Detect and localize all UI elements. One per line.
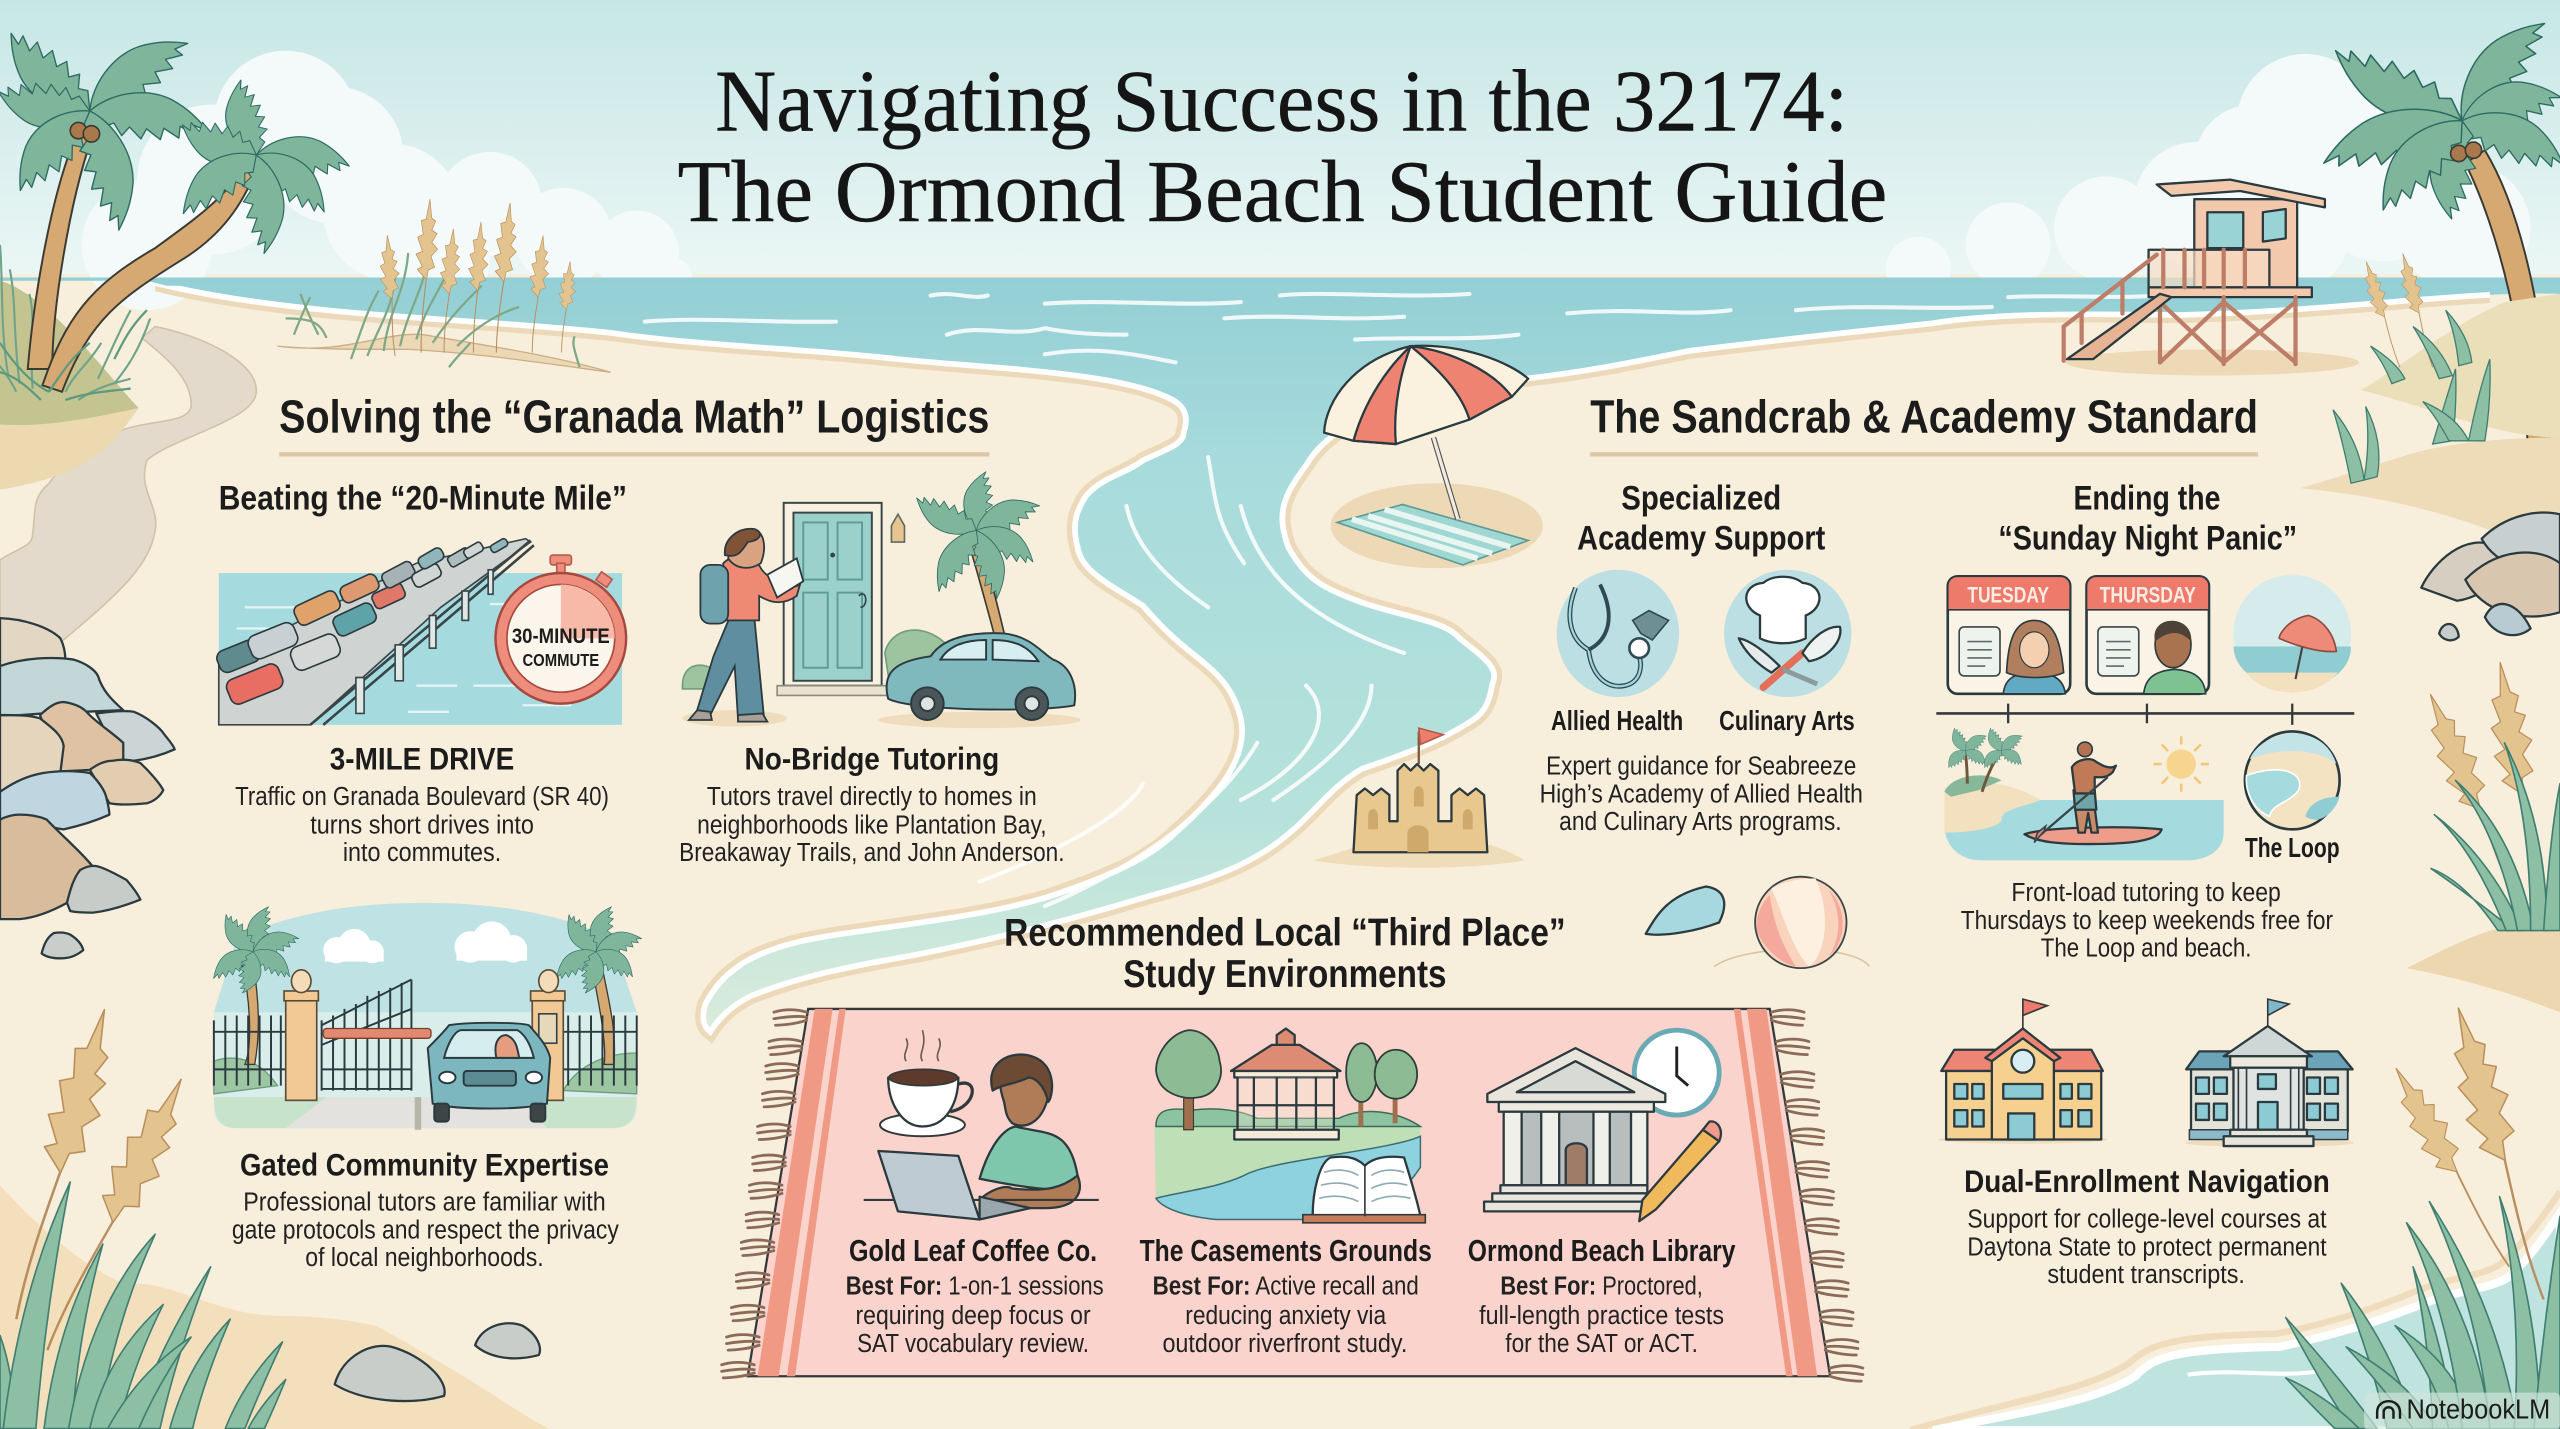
label: no-bridge tutoring: [679, 741, 1064, 867]
subheading: specialized academy support: [1577, 479, 1825, 557]
label: 3-mile drive: Traffic on Granada Boulevard (SR 40): [235, 783, 609, 811]
label: Gold Leaf Coffee: Gold Leaf Coffee Co.: [849, 1235, 1097, 1268]
label: Ormond Beach Library: for the SAT or ACT.: [1505, 1330, 1698, 1358]
panel: beach towel: [722, 1009, 1863, 1381]
left grassy dune: [0, 245, 150, 490]
car: [428, 1023, 550, 1122]
labels: academy icons: Culinary Arts: [1719, 705, 1855, 736]
label: gated community expertise: Professional tutors are familiar with: [243, 1189, 606, 1217]
illustration: paddleboarder: [1943, 726, 2224, 860]
text: ending the panic: Thursdays to keep weekends free for: [1961, 907, 2333, 935]
icon: red high school: [1938, 999, 2108, 1144]
label: Casements Grounds: The Casements Grounds: [1140, 1235, 1432, 1268]
label: dual-enrollment: Dual-Enrollment Navigation: [1964, 1163, 2330, 1199]
text: ending the panic: The Loop and beach.: [2041, 935, 2251, 963]
foreground grass: right middle: [2407, 660, 2560, 1012]
open book: [1313, 1157, 1420, 1216]
palms: [242, 960, 258, 1064]
title: [678, 53, 1887, 241]
cars: [214, 538, 509, 707]
label: gated community expertise: gate protocols and respect the privacy: [232, 1216, 619, 1244]
heading: Sandcrab and Academy: The Sandcrab & Academy Standard: [1590, 391, 2258, 443]
NotebookLM badge: [2364, 1393, 2560, 1429]
stopwatch: COMMUTE: [522, 650, 599, 670]
palm base grass: [0, 310, 147, 400]
icon: stethoscope circle: [1557, 570, 1679, 697]
heading: third place: [1004, 911, 1566, 996]
icon: coffee cup and student: [864, 1030, 1099, 1220]
heading: third place: Recommended Local “Third Place”: [1004, 911, 1566, 954]
subheading: specialized academy support: Academy Support: [1577, 519, 1825, 557]
illustration: bridge traffic and stopwatch: [214, 538, 626, 725]
icon: The Loop river bend: [2245, 731, 2340, 863]
calendar: Thursday: THURSDAY: [2100, 582, 2196, 607]
label: gated community expertise: Gated Community Expertise: [240, 1146, 609, 1182]
calendar: Thursday: [2087, 576, 2209, 694]
beach ball: [1714, 877, 1869, 968]
winding sandy path: [0, 327, 256, 678]
door: [784, 503, 882, 686]
label: Ormond Beach Library: Best For: Proctored,: [1500, 1273, 1703, 1301]
stopwatch: 30-MINUTE: [512, 625, 610, 648]
label: 3-mile drive: turns short drives into: [310, 811, 534, 839]
pillars: [284, 991, 565, 1100]
subheading: sunday night panic: [1998, 479, 2297, 557]
subheading: sunday night panic: Ending the: [2073, 479, 2220, 517]
subheading: 20-minute mile: Beating the “20-Minute Mile”: [219, 479, 627, 517]
text: ending the panic: [1961, 879, 2333, 963]
label: no-bridge tutoring: Tutors travel directly to homes in: [707, 783, 1037, 811]
palm: [970, 542, 1009, 653]
title: Navigating Success in the 32174:: [715, 53, 1848, 151]
palm tree: left large: [0, 19, 211, 369]
label: 3-mile drive: 3-MILE DRIVE: [330, 741, 514, 777]
label: Ormond Beach Library: full-length practice tests: [1479, 1302, 1724, 1330]
lifeguard tower: [2064, 180, 2359, 375]
subheading: specialized academy support: Specialized: [1621, 479, 1781, 517]
car: [887, 633, 1075, 720]
calendar: Tuesday: TUESDAY: [1967, 582, 2049, 607]
foreground grass: bottom right: [2286, 1002, 2560, 1429]
label: Gold Leaf Coffee: Best For: 1-on-1 sessions: [846, 1273, 1104, 1301]
heading: Granada Math logistics: Solving the “Granada Math” Logistics: [279, 391, 989, 443]
label: 3-mile drive: into commutes.: [343, 839, 501, 867]
lawn: [214, 1097, 637, 1128]
NotebookLM badge: NotebookLM: [2407, 1394, 2550, 1425]
foreground grass: bottom left: [0, 1003, 286, 1429]
sun: [2167, 749, 2196, 779]
label: Gold Leaf Coffee: SAT vocabulary review.: [857, 1330, 1089, 1358]
text: academy support: [1540, 753, 1863, 836]
stopwatch: [496, 555, 626, 704]
clouds: right: [1886, 54, 2531, 302]
heading: Granada Math logistics: [279, 391, 989, 456]
label: dual-enrollment: Daytona State to protect permanent: [1967, 1233, 2327, 1261]
label: no-bridge tutoring: Breakaway Trails, and John Anderson.: [679, 839, 1064, 867]
label: no-bridge tutoring: neighborhoods like Plantation Bay,: [697, 811, 1047, 839]
ocean and winding tidal river: [0, 278, 2560, 1032]
labels: academy icons: [1551, 705, 1855, 736]
label: Ormond Beach Library: Ormond Beach Library: [1468, 1235, 1736, 1268]
label: dual-enrollment: student transcripts.: [2047, 1261, 2245, 1289]
gate arm: [323, 1029, 431, 1038]
wave streaks: [645, 294, 2171, 906]
person: [689, 529, 803, 722]
calendar: Tuesday: [1948, 576, 2070, 694]
icon: Casements gazebo and river: [1154, 1029, 1425, 1223]
right dune and grass: [2300, 251, 2560, 563]
icon: library, clock, pencil: [1484, 1030, 1721, 1221]
bottom-left dune: [0, 1185, 555, 1429]
label: no-bridge tutoring: No-Bridge Tutoring: [744, 741, 999, 777]
labels: academy icons: Allied Health: [1551, 705, 1683, 736]
sea oats and dune: center-left: [278, 199, 611, 372]
seashell: [1646, 886, 1724, 935]
label: gated community expertise: [232, 1146, 619, 1272]
label: Ormond Beach Library: [1468, 1235, 1736, 1358]
label: Casements Grounds: outdoor riverfront study.: [1162, 1330, 1407, 1358]
trees: [1184, 1091, 1193, 1130]
fence and gate: [214, 980, 637, 1091]
label: dual-enrollment: [1964, 1163, 2330, 1289]
text: ending the panic: Front-load tutoring to keep: [2011, 879, 2281, 907]
icon: beach umbrella circle: [2233, 575, 2351, 692]
sandcastle: [1313, 728, 1525, 868]
bottom-right shallow water: [1910, 1192, 2560, 1429]
schedule timeline: [1936, 704, 2354, 725]
beach umbrella and towel: [1324, 346, 1543, 568]
hedge: [682, 630, 947, 689]
clouds: left: [82, 51, 692, 310]
label: 3-mile drive: [235, 741, 609, 867]
left rocks: [0, 618, 175, 958]
text: academy support: and Culinary Arts programs.: [1559, 808, 1842, 836]
icon: blue college: [2184, 999, 2354, 1147]
text: academy support: High’s Academy of Allied Health: [1540, 780, 1863, 808]
subheading: sunday night panic: “Sunday Night Panic”: [1998, 519, 2297, 557]
label: Casements Grounds: reducing anxiety via: [1185, 1302, 1387, 1330]
palm tree: right: [2316, 4, 2560, 444]
label: gated community expertise: of local neighborhoods.: [305, 1244, 544, 1272]
label: dual-enrollment: Support for college-level courses at: [1967, 1206, 2327, 1234]
heading: Sandcrab and Academy: [1590, 391, 2258, 456]
fringe left: [722, 1010, 807, 1378]
title: The Ormond Beach Student Guide: [678, 143, 1887, 241]
icon: The Loop river bend: The Loop: [2245, 832, 2340, 863]
fringe right: [1771, 1010, 1863, 1381]
lantern: [891, 514, 904, 542]
label: Gold Leaf Coffee: requiring deep focus or: [856, 1302, 1091, 1330]
right rocks: [2421, 513, 2560, 640]
pebbles: [335, 1323, 540, 1401]
label: Casements Grounds: Best For: Active recall and: [1153, 1273, 1419, 1301]
label: Gold Leaf Coffee: [846, 1235, 1104, 1358]
illustration: tutor arriving at home door: [682, 470, 1081, 728]
gazebo: [1231, 1045, 1340, 1071]
palm tree: left curved: [42, 77, 351, 392]
text: academy support: Expert guidance for Seabreeze: [1546, 753, 1856, 781]
bridge: [219, 539, 531, 725]
icon: chef hat and tools circle: [1724, 570, 1851, 697]
label: Casements Grounds: [1140, 1235, 1432, 1358]
background: sky: [0, 0, 2560, 281]
illustration: gated community: [206, 903, 644, 1130]
heading: third place: Study Environments: [1123, 953, 1447, 996]
